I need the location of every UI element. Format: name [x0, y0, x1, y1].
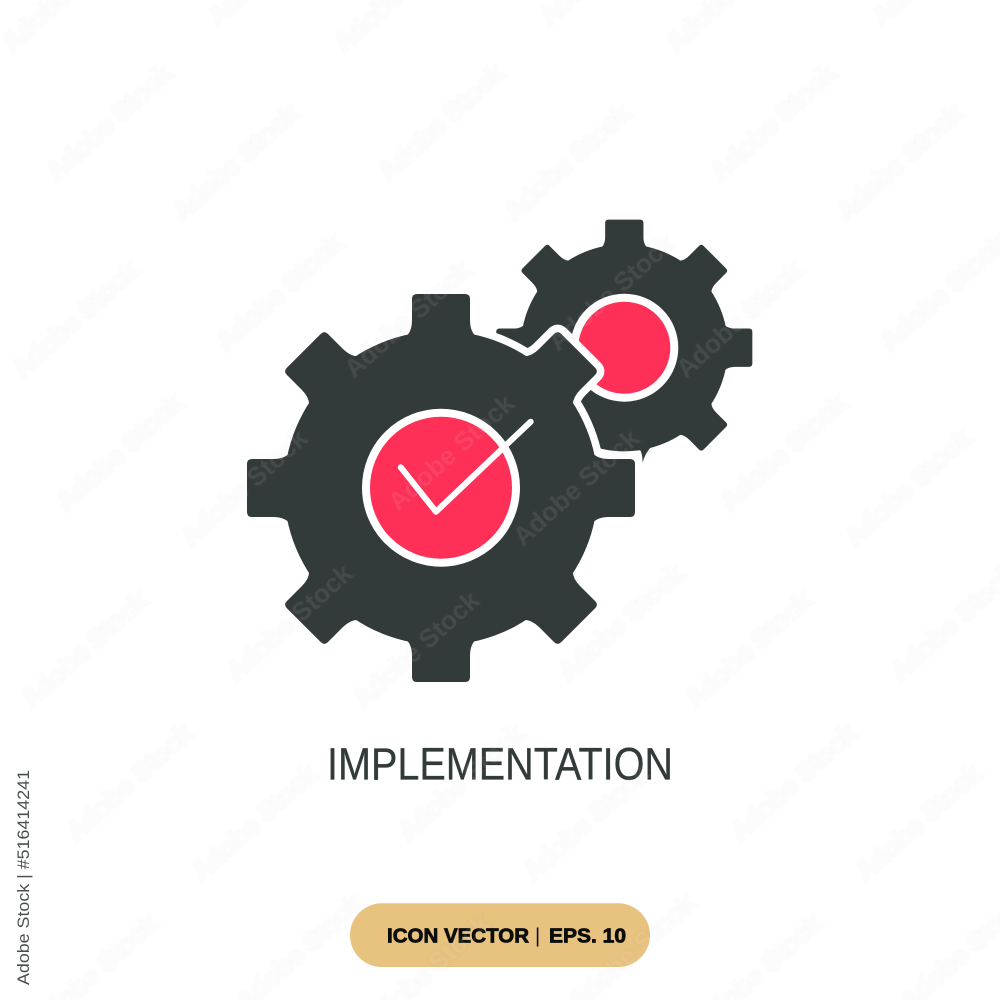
watermark pattern: Adobe Stock: [6, 255, 144, 384]
watermark pattern: Adobe Stock: [552, 558, 690, 687]
watermark pattern: Adobe Stock: [724, 718, 862, 847]
watermark pattern: Adobe Stock: [338, 255, 476, 384]
watermark pattern: Adobe Stock: [347, 585, 485, 714]
icon: small gear red hub: [574, 298, 674, 398]
title: IMPLEMENTATION: [327, 738, 673, 789]
watermark pattern: Adobe Stock: [507, 423, 645, 552]
badge background: [350, 903, 650, 967]
watermark pattern: Adobe Stock: [517, 758, 655, 887]
watermark pattern: Adobe Stock: [839, 423, 977, 552]
watermark pattern: Adobe Stock: [185, 758, 323, 887]
watermark pattern: Adobe Stock: [704, 58, 842, 187]
watermark pattern: Adobe Stock: [220, 558, 358, 687]
watermark pattern: Adobe Stock: [542, 228, 680, 357]
watermark pattern: Adobe Stock: [50, 388, 188, 517]
badge label: |: [535, 926, 540, 948]
icon: large gear white outline: [284, 294, 635, 651]
watermark pattern: Adobe Stock: [15, 585, 153, 714]
watermark pattern: Adobe Stock: [372, 58, 510, 187]
watermark pattern: Adobe Stock: [849, 758, 987, 887]
watermark pattern: Adobe Stock: [40, 58, 178, 187]
badge label: [387, 924, 626, 948]
watermark pattern: Adobe Stock: [60, 718, 198, 847]
watermark pattern: Adobe Stock: [175, 423, 313, 552]
watermark pattern: Adobe Stock: [166, 98, 304, 227]
watermark pattern: Adobe Stock: [830, 98, 968, 227]
icon: large gear: [247, 294, 635, 682]
icon: small gear: [496, 220, 752, 456]
badge label: ICON VECTOR: [387, 924, 529, 948]
watermark pattern: Adobe Stock: [210, 228, 348, 357]
icon: two gears with check mark: [247, 220, 752, 682]
watermark pattern: Adobe Stock: [392, 718, 530, 847]
badge: icon vector eps 10: [350, 903, 650, 967]
watermark pattern: Adobe Stock: [714, 388, 852, 517]
watermark pattern: Adobe Stock: [679, 585, 817, 714]
icon: check mark: [401, 422, 531, 512]
watermark pattern: Adobe Stock: [498, 98, 636, 227]
icon: large gear red hub: [366, 413, 516, 563]
watermark pattern: Adobe Stock: [670, 255, 808, 384]
watermark pattern: Adobe Stock: [382, 388, 520, 517]
badge label: EPS. 10: [549, 924, 626, 948]
icon: small gear lower sliver: [636, 446, 652, 463]
side stock label: Adobe Stock | #516414241: [14, 770, 33, 985]
